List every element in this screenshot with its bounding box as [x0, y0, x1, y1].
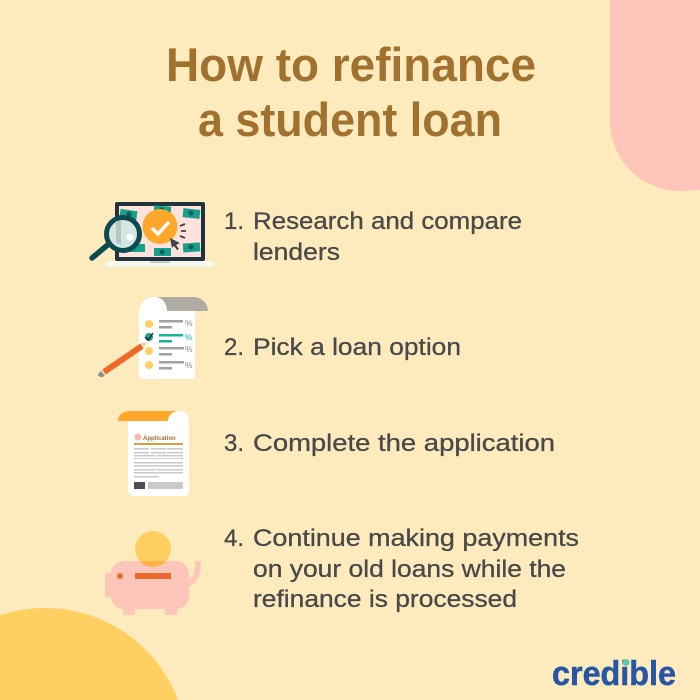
- icon: checklist with pencil: %: [185, 318, 193, 328]
- title: [166, 39, 536, 147]
- icon: laptop with magnifier: [92, 202, 215, 267]
- icon: application form: [118, 411, 189, 496]
- title: How to refinance: [166, 39, 536, 92]
- step 1 text: Research and compare: [253, 208, 522, 235]
- icon: checklist with pencil: %: [185, 332, 193, 342]
- step 4 text: on your old loans while the: [253, 556, 566, 583]
- step 1 text: 1.: [224, 208, 244, 235]
- step 2 text: Pick a loan option: [253, 334, 461, 361]
- icon: application form: Application: [143, 436, 176, 442]
- step 4 text: [224, 525, 579, 613]
- icon: checklist with pencil: %: [185, 360, 193, 370]
- icon: checklist with pencil: [98, 297, 208, 379]
- step 4 text: Continue making payments: [253, 525, 579, 552]
- logo: credible: credible: [552, 655, 676, 693]
- step 1 text: [224, 208, 522, 266]
- title: a student loan: [198, 94, 502, 147]
- icon: checklist with pencil: %: [185, 344, 193, 354]
- step 3 text: Complete the application: [253, 430, 555, 457]
- decorative pink corner shape: [610, 0, 700, 191]
- step 4 text: 4.: [224, 525, 244, 552]
- icon: piggy bank with coin: [105, 531, 198, 615]
- step 1 text: lenders: [253, 239, 340, 266]
- step 2 text: 2.: [224, 334, 244, 361]
- decorative yellow corner shape: [0, 608, 178, 700]
- step 3 text: 3.: [224, 430, 244, 457]
- step 4 text: refinance is processed: [253, 586, 517, 613]
